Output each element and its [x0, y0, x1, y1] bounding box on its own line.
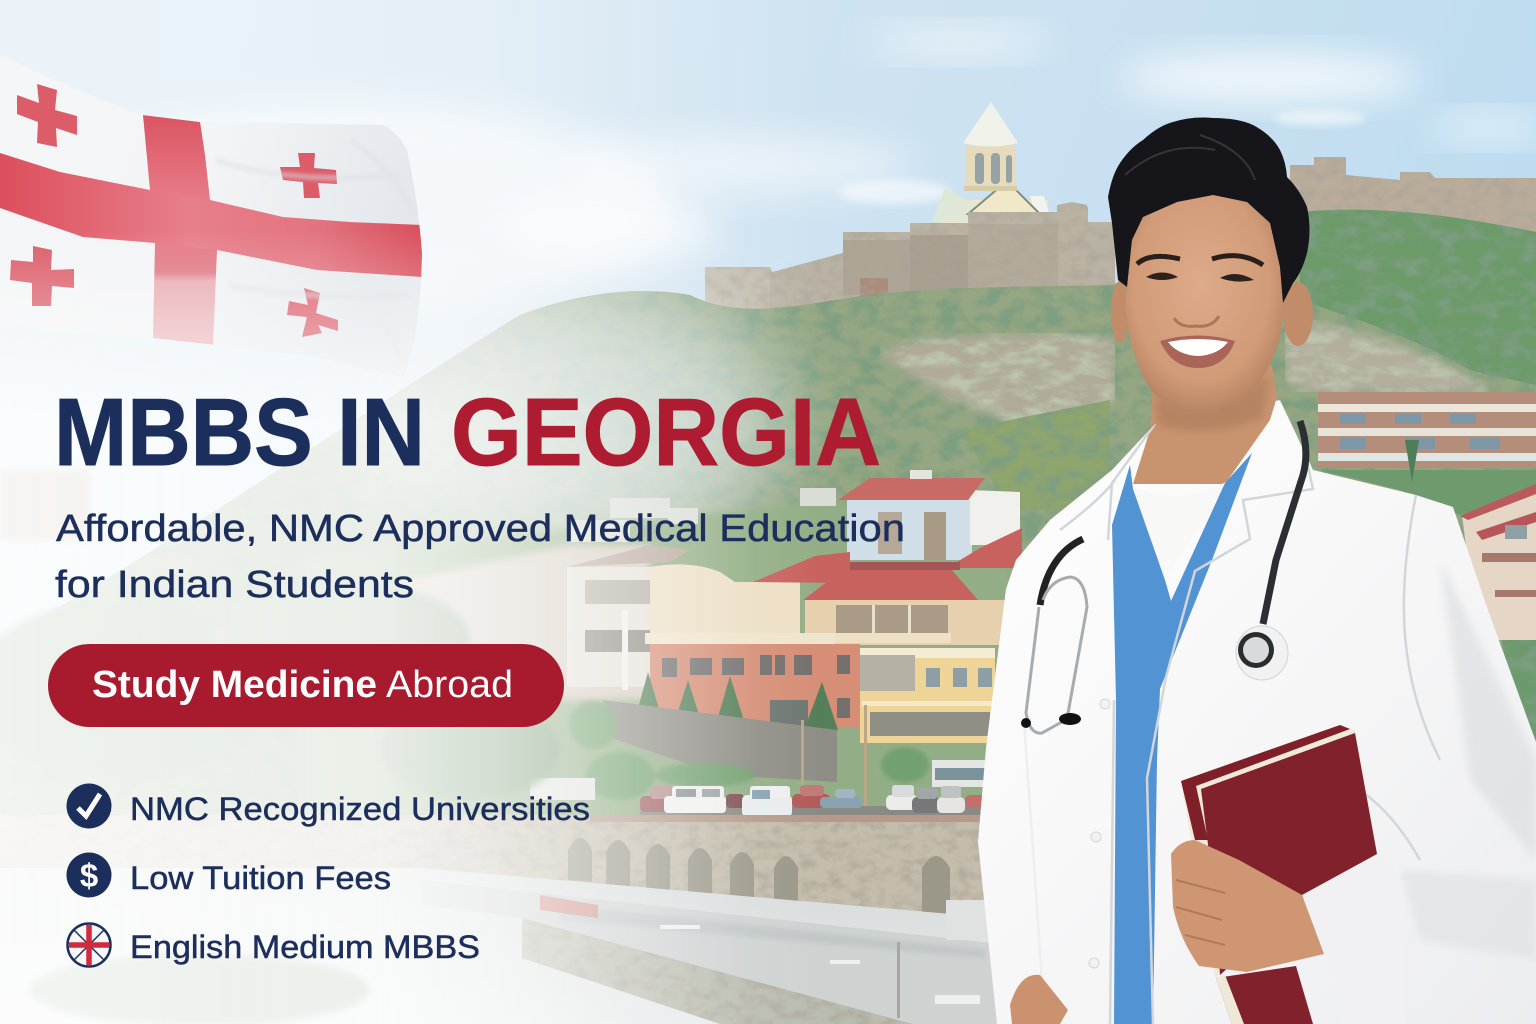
doctor: soft coat shadows — [1400, 560, 1536, 960]
title: GEORGIA — [451, 379, 881, 486]
background: parked cars and bus — [530, 760, 989, 817]
background: haze over the left hill — [350, 290, 790, 550]
call to action pill — [48, 644, 564, 727]
doctor: smile — [1160, 336, 1235, 368]
town: faded left block — [360, 545, 690, 700]
background: Narikala fortress on the hill — [705, 202, 1115, 325]
doctor: book lower part — [1216, 966, 1313, 1024]
doctor: stethoscope — [1021, 421, 1306, 733]
title — [54, 379, 881, 486]
doctor: white coat — [978, 400, 1536, 1024]
town: bushes — [569, 701, 929, 800]
town: tree backdrop — [300, 500, 1010, 820]
white fog overlay: lower left — [0, 298, 723, 1024]
subtitle: Affordable, NMC Approved Medical Education — [56, 508, 905, 550]
doctor: coat sleeve over book — [1302, 854, 1405, 1024]
town: distant pale houses — [570, 488, 836, 542]
icon: dollar: $ — [80, 857, 98, 894]
background: arched stone river wall — [0, 815, 985, 918]
town: salmon building — [645, 633, 860, 728]
background: clouds — [30, 28, 1536, 320]
background: left-side faded trees and buildings — [0, 470, 560, 1024]
doctor: stethoscope chestpiece — [1236, 626, 1288, 680]
background: green hillside — [0, 210, 1536, 830]
background: distant right fortress — [1290, 157, 1536, 232]
town: retaining wall — [603, 700, 837, 782]
doctor: ears — [1111, 281, 1313, 346]
doctor: coat buttons — [1089, 699, 1110, 968]
doctor: coat folds and lapels — [1024, 400, 1440, 1024]
doctor: nose — [1174, 316, 1219, 326]
Georgian flag — [0, 55, 422, 378]
doctor: hand holding book — [1171, 840, 1324, 972]
town: cypress trees — [637, 672, 838, 730]
doctor: hair — [1108, 118, 1310, 303]
town: yellow building — [860, 648, 995, 743]
doctor: red book — [1181, 725, 1377, 978]
doctor: blue scrubs — [1112, 453, 1252, 1024]
icon: union flag — [68, 924, 110, 966]
doctor: lower hand in pocket — [1010, 975, 1068, 1024]
flag: lower fade — [10, 243, 422, 377]
feature: NMC recognized: NMC Recognized Universities — [130, 791, 590, 827]
icon: check mark — [66, 784, 112, 828]
call to action pill: Study Medicine — [92, 664, 377, 706]
doctor: neck — [1133, 365, 1277, 484]
background: church on the fortress — [932, 102, 1050, 226]
subtitle — [55, 508, 905, 606]
doctor: hair highlights — [1125, 135, 1255, 180]
icon: dollar — [66, 852, 112, 898]
doctor: shadow under chin — [1155, 375, 1270, 431]
feature: low fees — [66, 852, 391, 898]
town: lamp posts — [801, 705, 867, 810]
feature: low fees: Low Tuition Fees — [130, 860, 391, 896]
feature: English medium — [68, 924, 480, 966]
flag: fabric folds — [217, 160, 337, 300]
town: red roofs — [753, 528, 1022, 600]
background: red-roof houses right — [1460, 484, 1536, 640]
subtitle: for Indian Students — [55, 564, 414, 606]
doctor: eyebrows and eyes — [1137, 256, 1263, 282]
feature: NMC recognized — [66, 784, 590, 828]
call to action pill: Abroad — [386, 664, 513, 706]
town: white-blue house with red roof — [838, 470, 1020, 560]
doctor: book page edge — [1216, 975, 1244, 1024]
background: hillside apartments right — [1318, 392, 1536, 482]
flag: white field — [0, 55, 422, 377]
town: balcony storey — [805, 600, 1005, 645]
background: road and river embankment — [0, 868, 1010, 1024]
flag: small crosses — [10, 84, 338, 337]
town: cream wall building — [650, 564, 800, 640]
feature: English medium: English Medium MBBS — [130, 929, 480, 965]
white fog overlay: whole height — [0, 0, 820, 1024]
doctor: white undershirt — [1128, 478, 1232, 578]
doctor: fingers — [1176, 880, 1225, 945]
flag: red cross — [0, 115, 422, 346]
title: MBBS IN — [54, 379, 425, 486]
background: colourful town buildings — [300, 470, 1022, 820]
doctor: face — [1126, 192, 1284, 413]
doctor figure — [978, 118, 1536, 1024]
